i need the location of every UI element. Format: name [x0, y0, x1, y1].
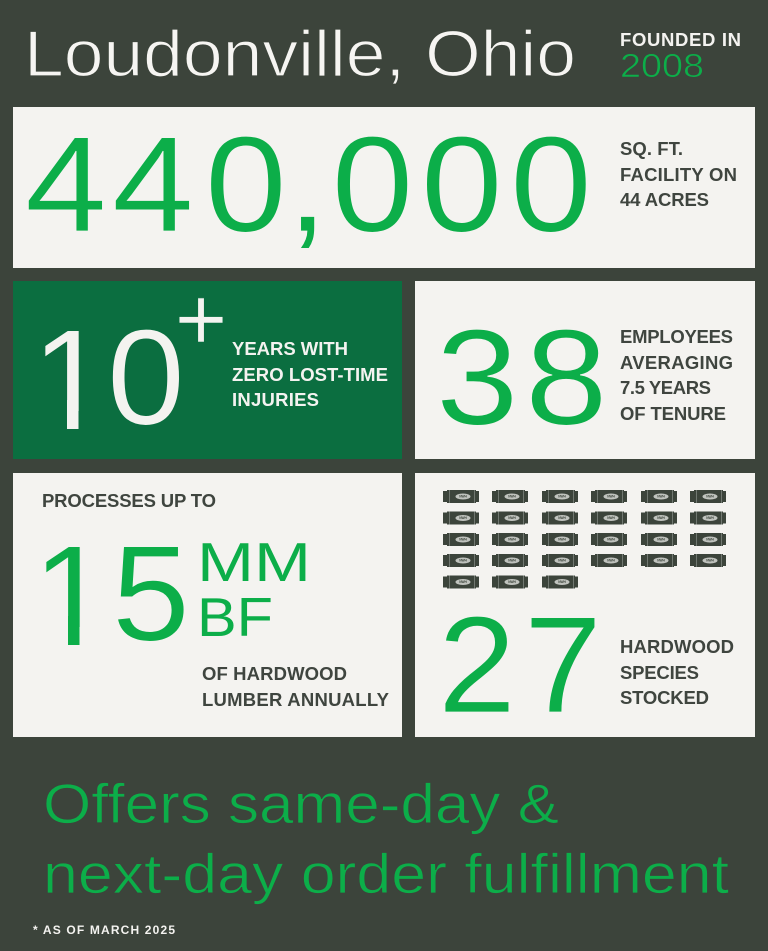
facility label [620, 138, 737, 210]
species label: STOCKED [620, 687, 709, 708]
employees label: AVERAGING [620, 352, 733, 373]
icon grid: lumber bundles: NWH [558, 516, 566, 520]
icon grid: lumber bundles: NWH [508, 495, 516, 499]
big number: 10+: + [175, 270, 227, 370]
panel: facility size [13, 107, 755, 268]
icon grid: lumber bundles: NWH [459, 538, 467, 542]
icon grid: lumber bundles: NWH [558, 495, 566, 499]
big number: 10+ [32, 270, 227, 454]
icon grid: lumber bundles: NWH [607, 495, 615, 499]
big number: 10+: 10 [32, 302, 185, 454]
big number: 38: 38 [436, 302, 608, 454]
icon grid: lumber bundles: NWH [657, 538, 665, 542]
founded block: 2008 [620, 47, 704, 84]
icon grid: lumber bundles [443, 490, 726, 588]
icon grid: lumber bundles: NWH [706, 538, 714, 542]
employees label: OF TENURE [620, 403, 726, 424]
unit: MM BF: BF [197, 586, 273, 648]
species label: SPECIES [620, 662, 699, 683]
panel: species stocked [415, 473, 755, 742]
title: Loudonville, Ohio [24, 17, 576, 90]
icon grid: lumber bundles: NWH [508, 559, 516, 563]
safety label: INJURIES [232, 389, 319, 410]
employees label: EMPLOYEES [620, 326, 733, 347]
icon grid: lumber bundles: NWH [508, 580, 516, 584]
panel: employees [415, 281, 755, 459]
icon grid: lumber bundles: NWH [706, 559, 714, 563]
facility label: FACILITY ON [620, 164, 737, 185]
icon grid: lumber bundles: NWH [706, 495, 714, 499]
footnote: * AS OF MARCH 2025 [33, 923, 175, 937]
unit: MM BF: MM [197, 531, 311, 593]
icon grid: lumber bundles: NWH [459, 580, 467, 584]
big number: 27: 27 [438, 589, 602, 742]
icon grid: lumber bundles: NWH [558, 538, 566, 542]
employees label: 7.5 YEARS [620, 377, 711, 398]
big number: 15: 15 [32, 518, 190, 670]
facility label: 44 ACRES [620, 189, 709, 210]
icon grid: lumber bundles: NWH [657, 495, 665, 499]
icon grid: lumber bundles: NWH [459, 495, 467, 499]
employees label [620, 326, 733, 424]
lumber label [202, 663, 390, 710]
safety label: ZERO LOST-TIME [232, 364, 388, 385]
species label: HARDWOOD [620, 636, 734, 657]
icon grid: lumber bundles: NWH [657, 516, 665, 520]
label: processes up to: PROCESSES UP TO [42, 490, 216, 511]
icon grid: lumber bundles: NWH [558, 580, 566, 584]
big number: 440,000: 440,000 [25, 108, 592, 260]
icon grid: lumber bundles: NWH [607, 516, 615, 520]
lumber label: LUMBER ANNUALLY [202, 689, 390, 710]
icon grid: lumber bundles: NWH [607, 538, 615, 542]
icon grid: lumber bundles: NWH [558, 559, 566, 563]
icon grid: lumber bundles: NWH [508, 516, 516, 520]
unit: MM BF [197, 531, 311, 648]
icon grid: lumber bundles: NWH [706, 516, 714, 520]
fulfillment statement [43, 772, 729, 905]
safety label [232, 338, 388, 410]
safety label: YEARS WITH [232, 338, 348, 359]
species label [620, 636, 734, 708]
panel: safety record [13, 270, 402, 459]
icon grid: lumber bundles: NWH [459, 516, 467, 520]
icon grid: lumber bundles: NWH [607, 559, 615, 563]
lumber label: OF HARDWOOD [202, 663, 347, 684]
founded block: FOUNDED IN [620, 29, 741, 50]
icon grid: lumber bundles: NWH [459, 559, 467, 563]
icon grid: lumber bundles: NWH [657, 559, 665, 563]
fulfillment statement: next-day order fulfillment [43, 842, 729, 905]
founded block [620, 29, 741, 84]
panel: lumber volume [13, 473, 402, 737]
icon grid: lumber bundles: NWH [508, 538, 516, 542]
facility label: SQ. FT. [620, 138, 683, 159]
fulfillment statement: Offers same-day & [43, 772, 559, 835]
